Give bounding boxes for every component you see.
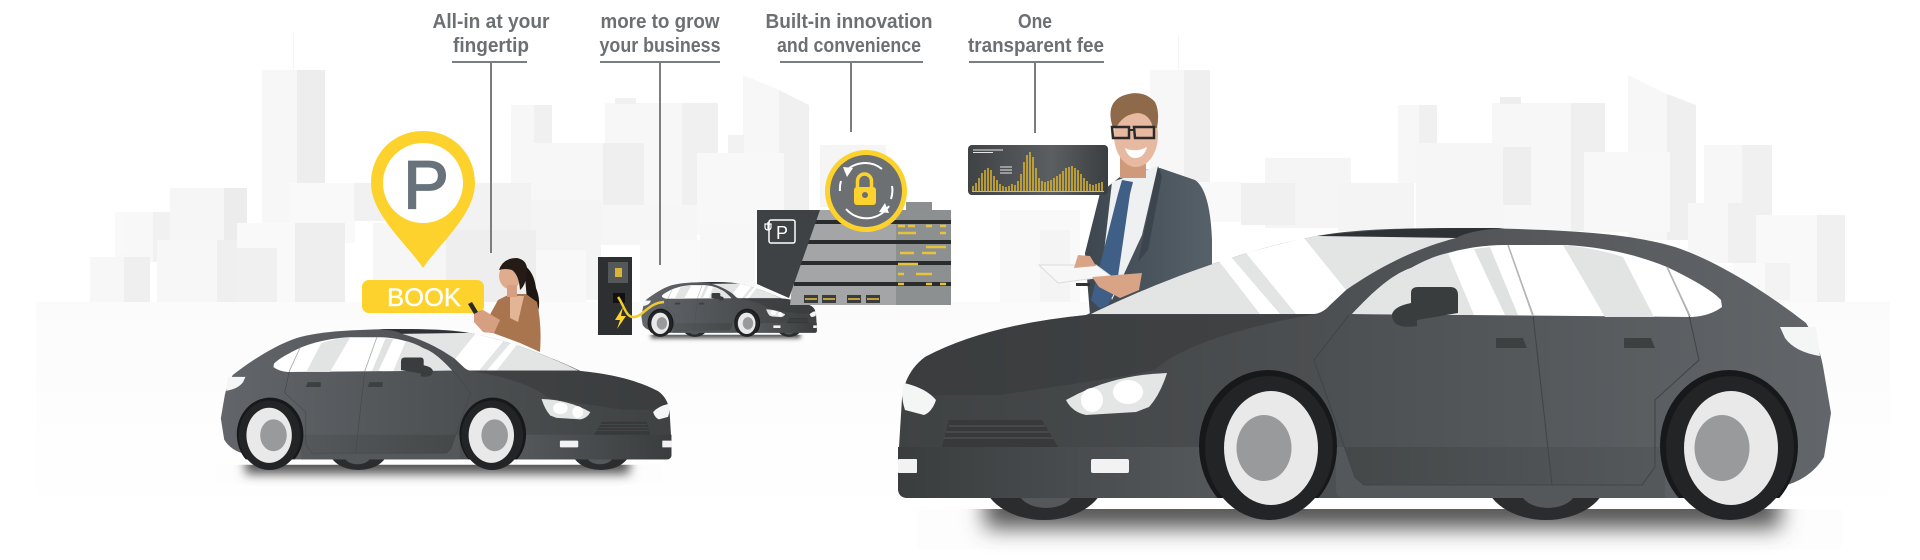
- skyline: left city: [90, 33, 886, 310]
- small car: [216, 329, 671, 484]
- icon: lock in circle: [825, 150, 907, 232]
- skyline: right city: [1000, 35, 1845, 305]
- label: One transparent fee: One: [1018, 11, 1052, 33]
- woman with phone: [468, 258, 541, 352]
- icon: parking pin: [371, 131, 475, 268]
- man with tablet: [1039, 93, 1212, 315]
- label: more to grow your business: more to grow: [600, 11, 720, 33]
- label: All-in at your fingertip: [432, 11, 550, 253]
- charging station: [598, 257, 632, 335]
- charging cable: [618, 297, 664, 317]
- label: Built-in innovation and convenience: and convenience: [777, 35, 921, 57]
- icon: parking pin: P: [403, 147, 449, 223]
- label: Built-in innovation and convenience: Built-in innovation: [766, 11, 932, 33]
- chart panel: [968, 145, 1108, 195]
- parking garage: P: [776, 223, 788, 243]
- label: All-in at your fingertip: All-in at your: [432, 11, 550, 33]
- button: BOOK: [362, 280, 484, 313]
- ground: [36, 302, 1890, 512]
- label: more to grow your business: [600, 11, 720, 265]
- large car: [898, 228, 1842, 549]
- label: One transparent fee: transparent fee: [968, 35, 1104, 57]
- label: All-in at your fingertip: fingertip: [453, 35, 529, 57]
- charging car: [639, 282, 817, 342]
- button: BOOK: BOOK: [387, 284, 461, 312]
- label: Built-in innovation and convenience: [766, 11, 932, 132]
- parking garage: [757, 202, 951, 305]
- label: more to grow your business: your business: [600, 35, 720, 57]
- label: One transparent fee: [968, 11, 1104, 133]
